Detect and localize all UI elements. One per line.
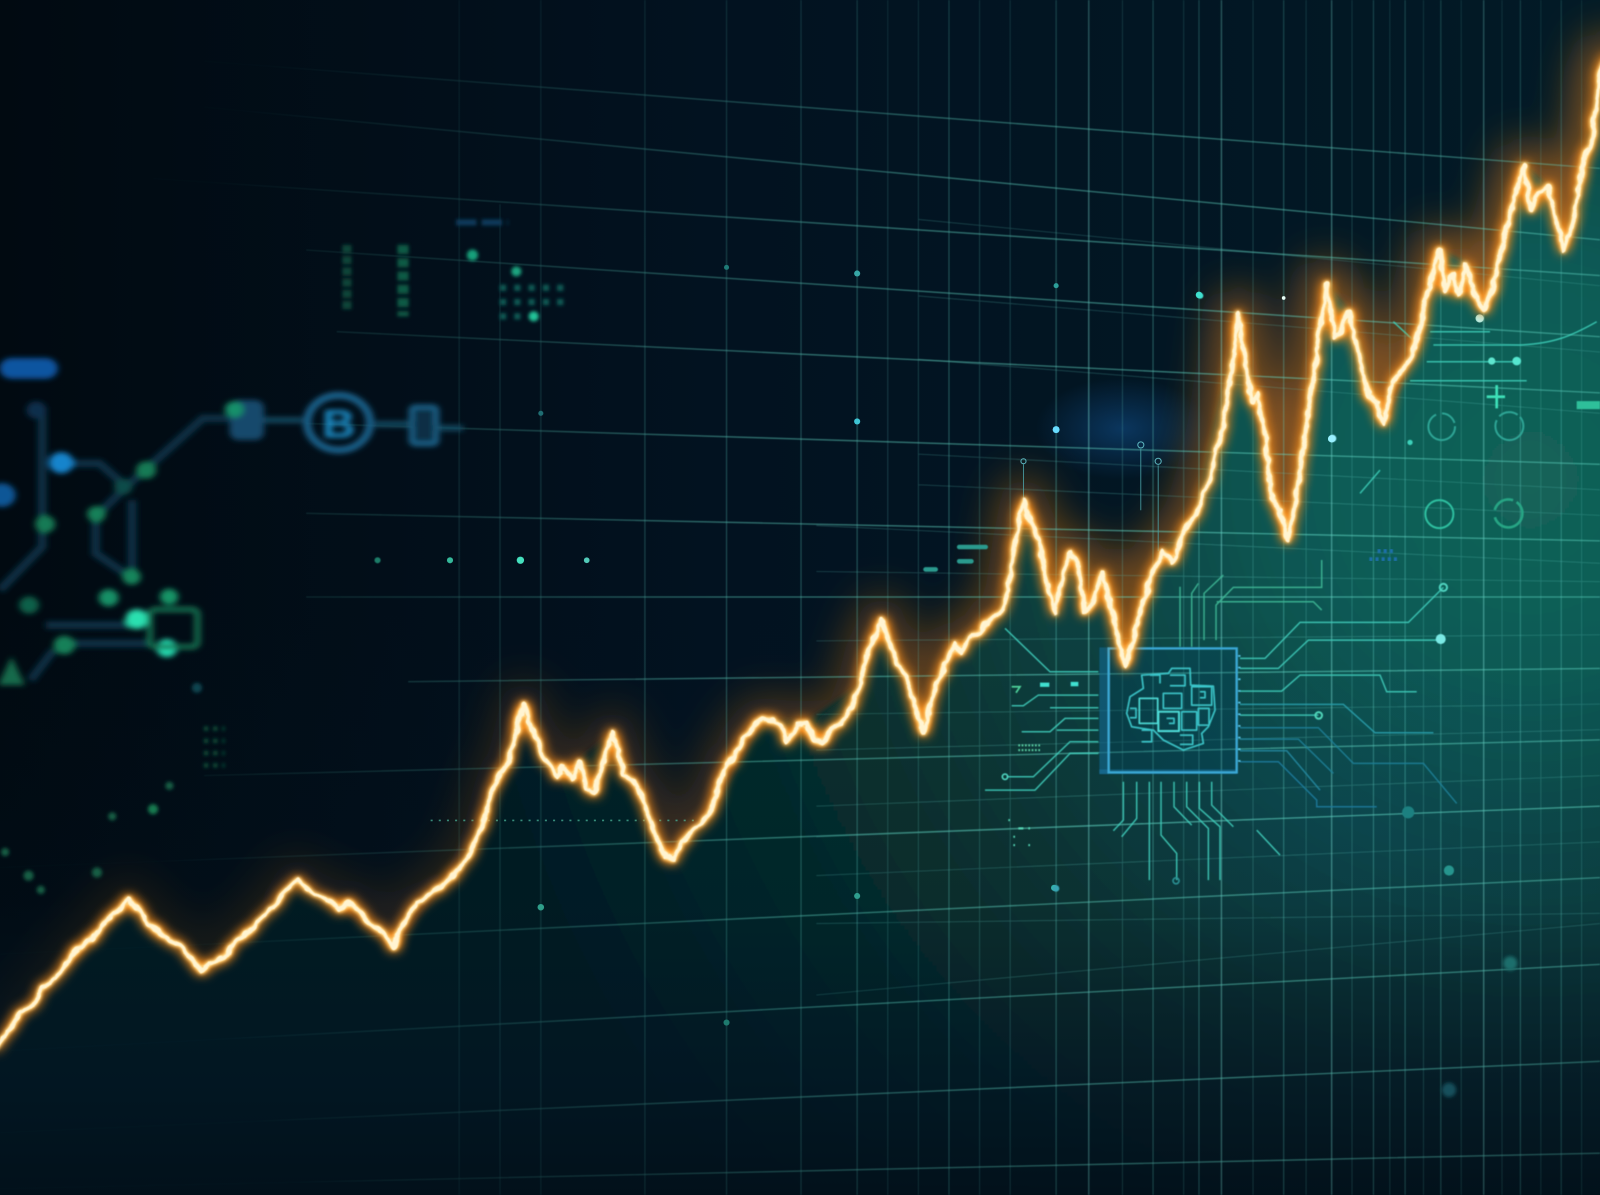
coin icon with connectors [225, 395, 463, 450]
chip body [1099, 647, 1239, 774]
left blurred icon network [0, 368, 463, 685]
chip trace terminals [1002, 584, 1447, 892]
top blurred data table [347, 222, 566, 321]
brain glyph [1127, 668, 1215, 750]
circuit routes [0, 407, 230, 680]
lower-left green dots [1, 683, 224, 894]
mid small markers [926, 442, 1398, 569]
glowing nodes [1197, 293, 1600, 445]
blue nodes [11, 337, 46, 399]
chart decorations: scattered data points [374, 265, 1517, 1097]
green nodes [136, 461, 156, 479]
circuit bus lines [1360, 322, 1597, 493]
dotted trend line [431, 819, 706, 821]
right circuit cluster with rings [1197, 293, 1600, 528]
AI chip with circuit traces [985, 560, 1457, 892]
chip traces [985, 560, 1457, 880]
main vertical grid lines [459, 0, 1561, 1195]
ring icons [1425, 412, 1523, 528]
fine grid [816, 0, 1600, 1195]
blue glow behind grid [1036, 378, 1209, 480]
coin icon with connectors: B [322, 402, 355, 447]
